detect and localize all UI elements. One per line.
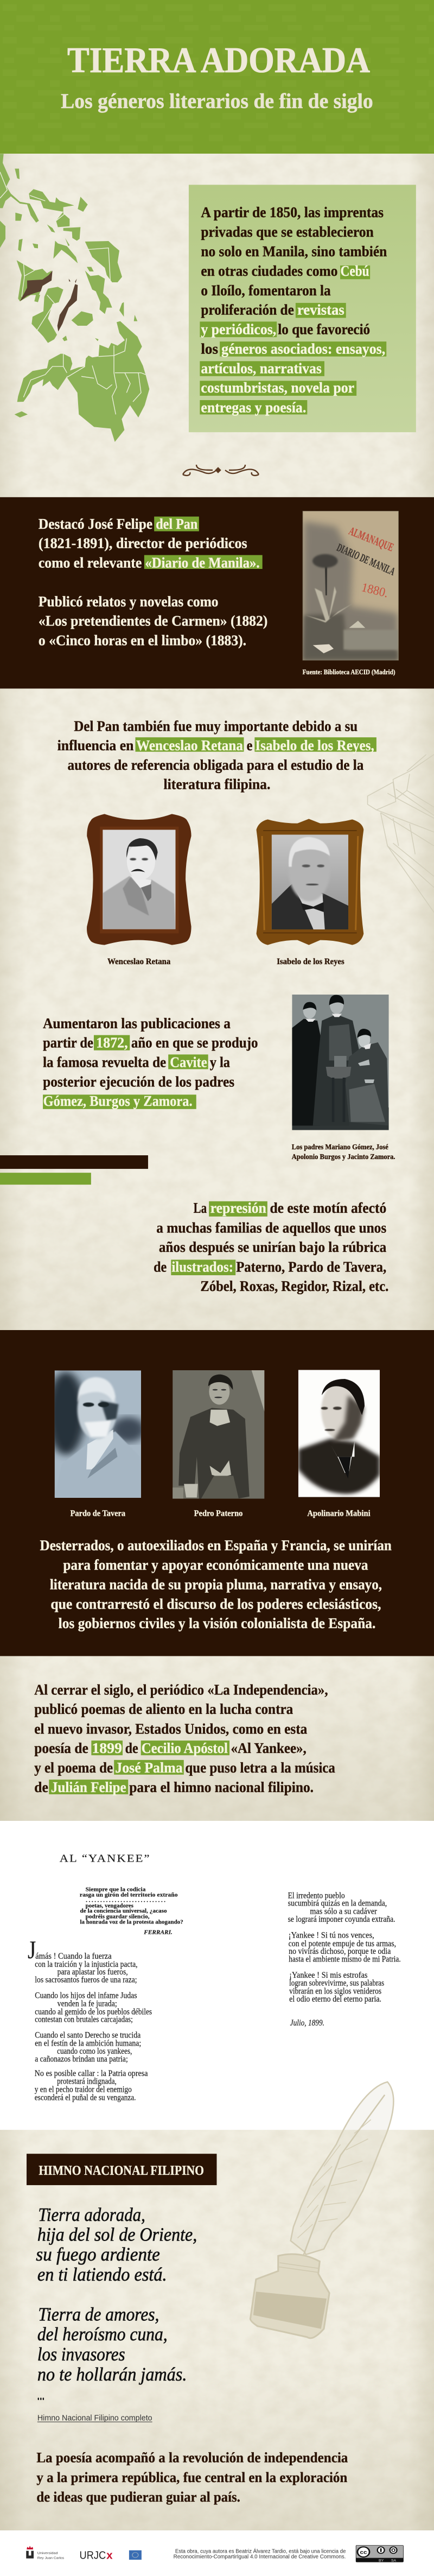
- header banner: [0, 0, 434, 154]
- poem left column: contestan con brutales carcajadas;: [35, 2015, 133, 2024]
- text block: del Pan: «Los pretendientes de Carmen» (1882): [39, 613, 267, 629]
- text block: himno lyrics: los invasores: [37, 2344, 125, 2365]
- panel: intro text box: entregas y poesía.: [201, 399, 306, 416]
- panel: intro text box: privadas que se establecieron: [201, 224, 374, 240]
- badge: Creative Commons BY SA: SA: [391, 2559, 397, 2562]
- poem left column: No es posible callar : la Patria opresa: [35, 2068, 148, 2078]
- text block: 1872: Cavite: [170, 1054, 207, 1070]
- badge: Creative Commons BY SA: [356, 2545, 403, 2562]
- text block: represión: represión: [210, 1200, 266, 1216]
- poem right column: logran sobrevivirme, sus palabras: [289, 1978, 384, 1988]
- poem right column: ¡Yankee ! Si tú nos vences,: [289, 1931, 374, 1940]
- subtitle: Los géneros literarios de fin de siglo: [61, 89, 373, 113]
- text block: cerrar el siglo: que puso letra a la música: [185, 1759, 335, 1776]
- text block: desterrados: Desterrados, o autoexiliados en España y Francia, se unirían: [40, 1537, 392, 1554]
- text block: represión: a muchas familias de aquellos que unos: [156, 1219, 386, 1236]
- text block: desterrados: para fomentar y apoyar económicamente una nueva: [63, 1556, 368, 1573]
- text block: del Pan influence: Del Pan también fue muy importante debido a su: [74, 718, 358, 734]
- captions: portraits: [107, 957, 344, 966]
- captions: exiliados: Apolinario Mabini: [307, 1509, 371, 1518]
- poem right column: no vivirás dichoso, porque te odia: [289, 1946, 391, 1956]
- text block: himno lyrics: [36, 2205, 197, 2404]
- poem right column: Julio, 1899.: [290, 2018, 324, 2028]
- poem left column: Cuando el santo Derecho se trucida: [35, 2030, 141, 2040]
- panel: intro text box: y periódicos,: [201, 321, 276, 338]
- text block: himno lyrics: del heroísmo cuna,: [37, 2324, 168, 2345]
- epigraph: poetas, vengadores: [86, 1903, 134, 1909]
- poem left column: protestará indignada,: [57, 2076, 117, 2086]
- text block: cerrar el siglo: para el himno nacional filipino.: [129, 1779, 314, 1795]
- text block: del Pan: del Pan: [156, 516, 197, 532]
- epigraph: [80, 1887, 183, 1935]
- text block: represión: de este motín afectó: [270, 1200, 386, 1216]
- text block: 1872: la famosa revuelta de: [43, 1054, 166, 1070]
- poem left column: los sacrosantos fueros de una raza;: [35, 1974, 137, 1984]
- text block: cerrar el siglo: publicó poemas de aliento en la lucha contra: [34, 1701, 293, 1717]
- text block: desterrados: literatura nacida de su propia pluma, narrativa y ensayo,: [50, 1577, 382, 1593]
- poem left column: venden la fe jurada;: [58, 1999, 117, 2008]
- map of central Philippines: [0, 154, 149, 442]
- portrait: Isabelo de los Reyes: [256, 819, 363, 945]
- badge: Creative Commons BY SA: cc: [360, 2549, 367, 2555]
- poem left column: esconderá el puñal de su venganza.: [35, 2092, 136, 2102]
- text block: del Pan influence: Wenceslao Retana: [136, 737, 243, 754]
- photo: Apolinario Mabini: [298, 1370, 380, 1497]
- poem left column: para aplastar los fueros,: [58, 1967, 128, 1977]
- licence text: Esta obra, cuya autora es Beatriz Álvarez Tardio, está bajo una licencia de: [175, 2548, 346, 2554]
- text block: del Pan: como el relevante: [39, 554, 142, 571]
- licence text: Reconocimiento-CompartirIgual 4.0 Internacional de Creative Commons.: [174, 2554, 346, 2560]
- text block: represión: ilustrados:: [171, 1258, 233, 1275]
- image: almanaque cover: [303, 511, 399, 661]
- epigraph: rasga un girón del territorio extraño: [80, 1892, 178, 1898]
- logo: Universidad Rey Juan Carlos: [26, 2546, 65, 2560]
- decorative bars: [0, 1155, 148, 1185]
- text block: 1872: año en que se produjo: [131, 1035, 258, 1051]
- text block: 1872: y la: [210, 1054, 230, 1070]
- text block: represión: de: [154, 1258, 167, 1275]
- epigraph: FERRARI.: [143, 1929, 173, 1935]
- poem right column: vibrarán en los siglos venideros: [289, 1986, 381, 1996]
- poem right column: [288, 1890, 401, 2028]
- text block: del Pan influence: autores de referencia obligada para el estudio de la: [67, 757, 364, 773]
- text block: del Pan: (1821-1891), director de periódicos: [39, 535, 247, 552]
- text block: himno lyrics: no te hollarán jamás.: [37, 2364, 187, 2385]
- poem title: AL “YANKEE”: [60, 1852, 150, 1864]
- captions: exiliados: [71, 1509, 371, 1518]
- text block: conclusion: [36, 2450, 348, 2505]
- captions: exiliados: Pardo de Tavera: [71, 1509, 125, 1518]
- text block: represión: Paterno, Pardo de Tavera,: [236, 1258, 386, 1275]
- photo: padres Gómez, Burgos y Zamora: [292, 995, 389, 1130]
- illustration: feather and inkwell: [250, 2082, 393, 2338]
- text block: himno lyrics: en ti latiendo está.: [37, 2264, 167, 2285]
- text block: cerrar el siglo: Cecilio Apóstol: [142, 1740, 228, 1756]
- logo: URJCx: URJC: [80, 2549, 106, 2561]
- text block: cerrar el siglo: Al cerrar el siglo, el periódico «La Independencia»,: [34, 1681, 328, 1698]
- caption: padres: [292, 1143, 395, 1161]
- text block: cerrar el siglo: Julián Felipe: [51, 1779, 126, 1795]
- epigraph: ............................: [86, 1897, 165, 1903]
- panel: intro text box: géneros asociados: ensayos,: [221, 340, 385, 357]
- ornament divider: [183, 465, 259, 476]
- panel: intro text box: los: [201, 340, 218, 357]
- image: almanaque cover: 1880.: [360, 580, 390, 600]
- text block: del Pan influence: [58, 718, 376, 793]
- panel: intro text box: lo que favoreció: [278, 321, 370, 338]
- licence text: [174, 2548, 346, 2560]
- poem right column: se logrará imponer coyunda extraña.: [288, 1914, 395, 1924]
- epigraph: la honrada voz de la protesta ahogando?: [80, 1919, 183, 1925]
- panel: intro text box: proliferación de: [201, 301, 294, 318]
- footer: [0, 2530, 434, 2576]
- poem left column: Cuando los hijos del infame Judas: [35, 1990, 137, 2000]
- photo: Pedro Paterno: [173, 1370, 264, 1499]
- text block: cerrar el siglo: «Al Yankee»,: [231, 1740, 307, 1756]
- poem right column: El irredento pueblo: [288, 1890, 345, 1900]
- logo: EU flag: [129, 2550, 142, 2560]
- sketch: stack of books: [368, 755, 434, 913]
- text block: cerrar el siglo: José Palma: [115, 1759, 183, 1776]
- text block: del Pan influence: Isabelo de los Reyes,: [255, 737, 374, 754]
- text block: 1872: posterior ejecución de los padres: [43, 1074, 234, 1090]
- text block: represión: años después se unirían bajo la rúbrica: [159, 1239, 387, 1255]
- text block: del Pan: [39, 516, 267, 648]
- panel: intro text box: no solo en Manila, sino también: [201, 243, 387, 260]
- captions: exiliados: Pedro Paterno: [194, 1509, 243, 1518]
- poem left column: y en el pecho traidor del enemigo: [35, 2085, 132, 2094]
- logo: URJCx: x: [106, 2549, 113, 2561]
- panel: intro text box: A partir de 1850, las imprentas: [201, 204, 384, 220]
- text block: conclusion: y a la primera república, fue central en la exploración: [36, 2469, 347, 2485]
- panel: poem Al Yankee: [0, 1821, 434, 2130]
- caption: padres: Apolonio Burgos y Jacinto Zamora.: [292, 1153, 395, 1161]
- text block: del Pan influence: literatura filipina.: [164, 776, 270, 793]
- epigraph: de la conciencia universal, ¿acaso: [80, 1908, 167, 1914]
- poem right column: con el potente empuje de tus armas,: [289, 1939, 396, 1948]
- text block: cerrar el siglo: de: [125, 1740, 138, 1756]
- panel: intro text box: en otras ciudades como: [201, 263, 337, 279]
- text block: himno lyrics: Tierra de amores,: [38, 2305, 159, 2325]
- title: TIERRA ADORADA: [67, 40, 371, 80]
- text block: himno lyrics: su fuego ardiente: [36, 2244, 160, 2265]
- text block: cerrar el siglo: y el poema de: [34, 1759, 113, 1776]
- text block: represión: Zóbel, Roxas, Regidor, Rizal, etc.: [200, 1278, 388, 1294]
- text block: 1872: Aumentaron las publicaciones a: [43, 1015, 231, 1031]
- text block: cerrar el siglo: 1899: [92, 1740, 122, 1756]
- text block: del Pan influence: influencia en: [58, 737, 133, 754]
- text block: desterrados: que contrarrestó el discurso de los poderes eclesiásticos,: [50, 1596, 381, 1612]
- text block: desterrados: [40, 1537, 392, 1631]
- captions: portraits: Wenceslao Retana: [107, 957, 171, 966]
- text block: 1872: partir de: [43, 1035, 93, 1051]
- epigraph: podréis guardar silencio,: [86, 1914, 150, 1920]
- text block: del Pan: Publicó relatos y novelas como: [39, 593, 219, 610]
- text block: himno lyrics: ...: [37, 2384, 45, 2404]
- poem right column: sucumbirá quizás en la demanda,: [288, 1898, 387, 1908]
- text block: del Pan influence: e: [247, 737, 252, 754]
- text block: 1872: 1872,: [96, 1035, 128, 1051]
- logo: Universidad Rey Juan Carlos: Universidad: [37, 2552, 58, 2555]
- poem left column: en el festín de la ambición humana;: [35, 2038, 141, 2048]
- panel: intro text box: [189, 185, 416, 432]
- image: almanaque cover: ALMANAQUE: [347, 524, 395, 554]
- poem right column: mas sólo a su cadáver: [310, 1906, 377, 1916]
- text block: del Pan: o «Cinco horas en el limbo» (1883).: [39, 632, 246, 648]
- text block: represión: La: [194, 1200, 207, 1216]
- logo: Universidad Rey Juan Carlos: Rey Juan Carlos: [37, 2556, 65, 2560]
- poem left column: con la traición y la injusticia pacta,: [35, 1959, 138, 1969]
- panel: exiliados dark band: [0, 1330, 434, 1656]
- text block: del Pan: «Diario de Manila».: [145, 554, 260, 571]
- portrait: Wenceslao Retana: [87, 814, 192, 945]
- poem left column: ámás ! Cuando la fuerza: [35, 1951, 112, 1961]
- link: himno completo: Himno Nacional Filipino completo: [37, 2414, 152, 2423]
- badge: Creative Commons BY SA: BY: [379, 2559, 384, 2562]
- poem left column: [28, 1935, 152, 2102]
- panel: intro text box: Cebú: [341, 263, 369, 279]
- poem left column: a cañonazos brindan una patria;: [35, 2054, 128, 2064]
- panel: del Pan dark band: [0, 497, 434, 688]
- photo: Pardo de Tavera: [54, 1370, 141, 1498]
- panel: intro text box: o Iloílo, fomentaron la: [201, 282, 331, 299]
- caption: padres: Los padres Mariano Gómez, José: [292, 1143, 388, 1151]
- text block: cerrar el siglo: el nuevo invasor, Estados Unidos, como en esta: [34, 1720, 308, 1737]
- panel: intro text box: artículos, narrativas: [201, 360, 322, 377]
- poem left column: cuando al gemido de los pueblos débiles: [35, 2007, 152, 2016]
- heading: Himno Nacional Filipino: [27, 2154, 216, 2185]
- text block: desterrados: los gobiernos civiles y la visión colonialista de España.: [59, 1615, 375, 1631]
- epigraph: Siempre que la codicia: [86, 1887, 146, 1893]
- text block: conclusion: de ideas que pudieran guiar al país.: [36, 2489, 240, 2505]
- text block: cerrar el siglo: de: [34, 1779, 48, 1795]
- poem left column: cuando como los yankees,: [57, 2046, 132, 2056]
- text block: cerrar el siglo: poesía de: [34, 1740, 88, 1756]
- poem right column: el odio eterno del eterno paria.: [289, 1994, 381, 2004]
- text block: 1872: Gómez, Burgos y Zamora.: [43, 1093, 193, 1109]
- poem right column: ¡Yankee ! Si mis estrofas: [289, 1970, 368, 1980]
- captions: portraits: Isabelo de los Reyes: [277, 957, 344, 966]
- text block: cerrar el siglo: [34, 1681, 335, 1795]
- caption: source: Fuente: Biblioteca AECID (Madrid): [303, 668, 395, 676]
- text block: himno lyrics: hija del sol de Oriente,: [37, 2225, 197, 2245]
- heading: Himno Nacional Filipino: HIMNO NACIONAL FILIPINO: [39, 2163, 204, 2178]
- text block: 1872: [43, 1015, 258, 1109]
- text block: conclusion: La poesía acompañó a la revolución de independencia: [36, 2450, 348, 2466]
- poem left column: J: [28, 1935, 36, 1964]
- panel: intro text box: costumbristas, novela por: [201, 379, 354, 396]
- panel: intro text box: revistas: [297, 301, 344, 318]
- text block: represión: [154, 1200, 388, 1294]
- text block: del Pan: Destacó José Felipe: [39, 516, 152, 532]
- text block: himno lyrics: Tierra adorada,: [38, 2205, 145, 2225]
